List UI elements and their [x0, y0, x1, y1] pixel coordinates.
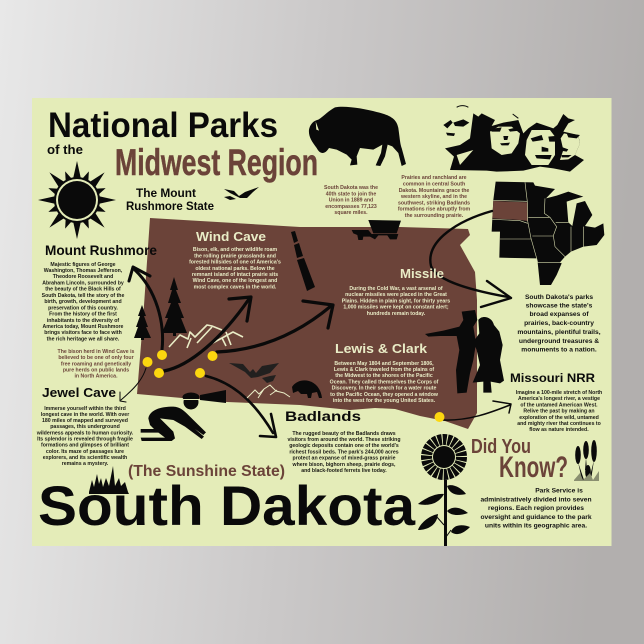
text: Lewis & Clark body: the Midwest to the shores of the Pacific [335, 373, 433, 379]
icon: Lewis and Clark silhouettes [425, 310, 504, 393]
heading: Mount Rushmore: Mount Rushmore [45, 242, 157, 258]
text: statehood facts: square miles. [334, 210, 368, 216]
text: statehood facts [324, 185, 378, 216]
text: Missouri NRR body: Relive the past by making an [523, 408, 595, 414]
text: prairies and ranchland: Prairies and ranchland are [401, 175, 467, 181]
text: bison herd note: free roaming and genetically [61, 362, 131, 368]
text: prairies and ranchland: southwest, striking Badlands [398, 200, 470, 206]
text: Jewel Cave body [36, 406, 134, 467]
text: Wind Cave body [189, 247, 281, 290]
text: Park Service fact: units within its geographic area. [485, 522, 587, 530]
arrow: to Wind Cave [164, 297, 251, 371]
text: Lewis & Clark body: Ocean. They called themselves the Corps of [330, 380, 439, 386]
arrow: to Badlands [206, 376, 276, 437]
heading: Jewel Cave: Jewel Cave [42, 385, 116, 400]
text: Badlands body: protect an expanse of mixed-grass prairie [293, 456, 396, 462]
text: Lewis & Clark body: to the Pacific Ocean, they opened a window [330, 392, 439, 398]
text: Mount Rushmore body: Majestic figures of George [50, 262, 116, 268]
text: Missouri NRR body: America's longest river, a vestige [518, 396, 600, 402]
text: Wind Cave body: most complex caves in the world. [194, 284, 277, 290]
text: Mount Rushmore body: From the history of the first [49, 312, 117, 318]
subtitle: of the: of the [47, 143, 83, 157]
icon: pine trees [134, 277, 187, 340]
text: Badlands body: richest fossil beds. The park's 244,000 acres [289, 450, 399, 456]
text: Jewel Cave body: longest cave in the world. With over [41, 412, 129, 418]
heading: The Mount Rushmore State: Rushmore State [126, 201, 214, 213]
text: Lewis & Clark body [330, 361, 439, 404]
text: bison herd note: believed to be one of only four [58, 355, 134, 361]
icon: Mount Rushmore faces [443, 106, 584, 172]
icon: missile [291, 231, 315, 291]
text: Missile body: During the Cold War, a vast arsenal of [349, 286, 443, 292]
text: South Dakota's parks: monuments to a nation. [521, 346, 597, 354]
text: Lewis & Clark body: into the west for the young United States. [333, 398, 436, 404]
icon: small mountains [247, 385, 290, 398]
text: South Dakota's parks: showcase the state's [526, 302, 593, 310]
text: Wind Cave body: the rolling prairie grasslands and [194, 254, 276, 260]
text: South Dakota's parks: South Dakota's parks [525, 294, 593, 301]
icon: cave explorer [141, 390, 226, 441]
text: Mount Rushmore body: the beauty of the Black Hills of [45, 286, 121, 292]
text: Missouri NRR body [516, 390, 602, 433]
text: Badlands body: and black-footed ferrets live today. [301, 468, 387, 474]
text: prairies and ranchland: common in central South [403, 182, 465, 188]
text: Mount Rushmore body [42, 262, 124, 342]
text: Park Service fact: oversight and guidance to the park [480, 514, 592, 521]
arrow: to Missouri NRR [443, 401, 511, 420]
text: South Dakota's parks: broad expanses of [529, 311, 589, 318]
text: Wind Cave body: Wind Cave, one of the longest and [193, 278, 277, 284]
text: Mount Rushmore body: inhabitants to the diversity of [47, 318, 119, 324]
title: National Parks: National Parks [48, 106, 278, 145]
text: Jewel Cave body: Immerse yourself within the third [44, 406, 126, 412]
state shape: South Dakota [137, 218, 477, 429]
text: South Dakota's parks: underground treasures & [519, 338, 599, 345]
arrow: to Mount Rushmore [129, 267, 163, 350]
text: Mount Rushmore body: Abraham Lincoln, surrounded by [42, 280, 124, 286]
text: Missile body [342, 286, 450, 317]
text: Wind Cave body: forested hillsides of one of America's [189, 260, 281, 266]
icon: black sun [38, 161, 116, 239]
icon: bison [309, 107, 406, 166]
arrow: Midwest map to parks text [430, 211, 511, 307]
heading: Wind Cave: Wind Cave [196, 229, 266, 244]
text: Mount Rushmore body: the rich heritage we all share. [47, 336, 120, 342]
text: South Dakota's parks: mountains, plentiful trails, [517, 329, 601, 336]
icon: bats near heading [224, 187, 259, 200]
text: bison herd note: pure herds on public lands [63, 368, 129, 374]
arrow: to Jewel Cave [120, 368, 146, 402]
text: Jewel Cave body: color. Its maze of passages lure [46, 449, 124, 455]
text: prairies and ranchland: Dakota. Mountains grace the [399, 188, 469, 194]
text: Jewel Cave body: 180 miles of mapped and surveyed [42, 418, 128, 424]
arrow: to Missile [217, 301, 333, 352]
text: statehood facts: South Dakota was the [324, 185, 378, 191]
text: Missouri NRR body: of the untamed American West. [520, 402, 598, 408]
text: Mount Rushmore body: Washington, Thomas Jefferson, [44, 268, 123, 274]
text: South Dakota's parks: prairies, back-country [524, 320, 594, 327]
heading: The Mount Rushmore State [126, 188, 214, 213]
text: Lewis & Clark body: Lewis & Clark traveled from the plains of [334, 367, 434, 373]
text: Jewel Cave body: formations and glimpses of brilliant [41, 442, 129, 448]
text: bison herd note [58, 349, 135, 380]
text: Mount Rushmore body: birth, growth, development and [44, 299, 122, 305]
heading: Did You Know? [471, 436, 568, 484]
text: Lewis & Clark body: Discovery. In their search for a water route [332, 386, 437, 392]
heading: The Sunshine State: (The Sunshine State) [128, 463, 285, 480]
text: Missouri NRR body: flow as nature intended. [529, 427, 589, 433]
text: statehood facts: Union in 1889 and [329, 198, 373, 204]
text: Wind Cave body: oldest national parks. Below the [195, 266, 275, 272]
text: Jewel Cave body: remains a mystery. [62, 461, 109, 467]
title: Midwest Region: Midwest Region [115, 142, 318, 183]
text: Missouri NRR body: and mighty river that continues to [517, 421, 601, 427]
map of the Midwest states [492, 182, 604, 285]
text: bison herd note: The bison herd in Wind Cave is [58, 349, 135, 355]
text: Mount Rushmore body: Theodore Roosevelt and [53, 274, 113, 280]
icon: small tree line [89, 466, 129, 494]
text: Park Service fact: Park Service is [535, 488, 583, 494]
text: Mount Rushmore body: South Dakota, tell the story of the [42, 293, 124, 299]
text: prairies and ranchland: formations rise abruptly from [398, 206, 471, 212]
text: Missile body: hundreds remain today. [367, 311, 426, 317]
icon: covered wagon and ox [352, 220, 401, 240]
text: Missile body: 1,000 missiles were kept on constant alert; [343, 304, 449, 310]
text: Jewel Cave body: passages, this underground [50, 424, 120, 430]
heading: Did You Know?: Did You [471, 436, 531, 458]
heading: Missile: Missile [400, 266, 444, 281]
text: South Dakota's parks [517, 294, 601, 354]
title: South Dakota: South Dakota [38, 474, 416, 537]
text: statehood facts: encompasses 77,123 [325, 204, 377, 210]
text: Wind Cave body: remnant island of intact prairie sits [192, 272, 278, 278]
text: Wind Cave body: Bison, elk, and other wildlife roam [193, 247, 277, 253]
text: Park Service fact [480, 488, 592, 530]
text: Badlands body: where bison, bighorn sheep, prairie dogs, [292, 462, 396, 468]
text: Badlands body: geologic deposits contain one of the world's [289, 443, 399, 449]
text: Lewis & Clark body: Between May 1804 and September 1806, [334, 361, 434, 367]
text: bison herd note: in North America. [74, 374, 118, 380]
text: Missouri NRR body: Imagine a 100-mile stretch of North [516, 390, 602, 396]
location dots [142, 350, 444, 422]
poster panel [32, 98, 612, 546]
icon: mountain outlines [169, 325, 243, 348]
heading: Lewis & Clark: Lewis & Clark [335, 341, 428, 356]
text: prairies and ranchland: the surrounding prairie. [405, 213, 464, 219]
text: Mount Rushmore body: America today, Mount Rushmore [43, 324, 124, 330]
icon: prairie grass [574, 440, 599, 481]
heading: Missouri NRR: Missouri NRR [510, 371, 595, 385]
text: Missile body: Plains. Hidden in plain sight, for thirty years [342, 298, 450, 304]
heading: Did You Know?: Know? [499, 451, 568, 484]
text: Badlands body: The rugged beauty of the Badlands draws [292, 431, 396, 437]
text: Jewel Cave body: Its splendor is revealed through fragile [37, 436, 133, 442]
text: Mount Rushmore body: preservation of this country. [48, 306, 118, 312]
text: prairies and ranchland [398, 175, 471, 219]
text: Badlands body [288, 431, 400, 474]
icon: bats in the state [229, 363, 279, 383]
text: Missile body: nuclear missiles were placed in the Great [345, 292, 447, 298]
text: Missouri NRR body: exploration of the wild, untamed [519, 415, 599, 421]
heading: The Mount Rushmore State: The Mount [136, 188, 196, 200]
text: Park Service fact: regions. Each region provides [488, 505, 584, 512]
heading: Badlands: Badlands [285, 408, 361, 424]
icon: small bison [292, 380, 322, 398]
text: statehood facts: 40th state to join the [326, 192, 376, 198]
text: Jewel Cave body: explorers, and its scientific wealth [43, 455, 127, 461]
icon: sunflower [418, 440, 470, 546]
text: Jewel Cave body: wilderness appeals to human curiosity. [36, 430, 134, 436]
text: Mount Rushmore body: brings visitors face to face with [44, 330, 122, 336]
text: Badlands body: visitors from around the world. These striking [288, 437, 400, 443]
text: Park Service fact: administratively divided into seven [480, 496, 592, 504]
text: prairies and ranchland: western skyline, and in the [400, 194, 467, 200]
